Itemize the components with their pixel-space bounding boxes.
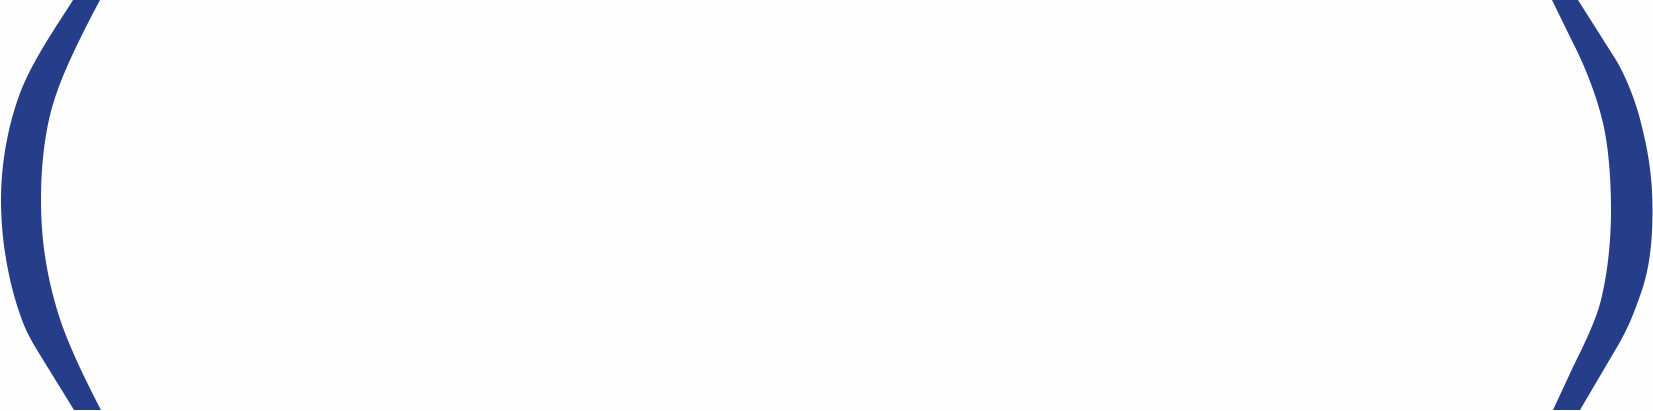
left curved bracket: [1, 0, 101, 410]
right curved bracket: [1552, 0, 1652, 410]
